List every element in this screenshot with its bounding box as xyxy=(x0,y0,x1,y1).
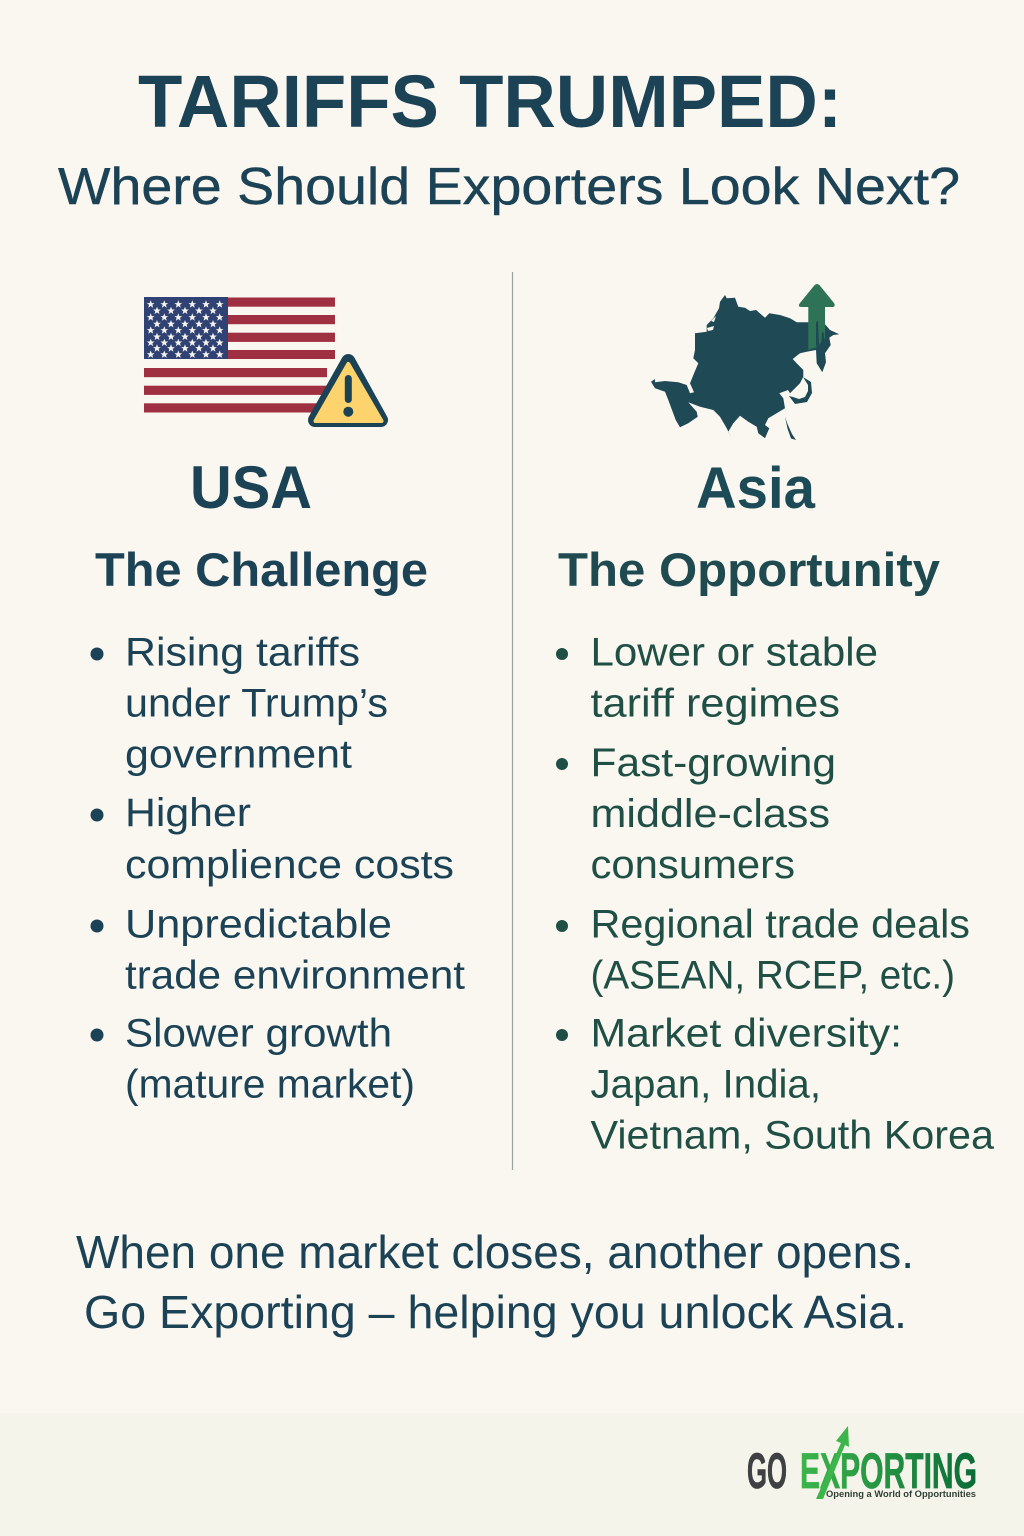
bullet: market diversity: Vietnam, South Korea xyxy=(590,1113,995,1157)
bullet: middle class xyxy=(556,741,836,887)
bullet: slower growth xyxy=(90,1011,415,1106)
bullet: slower growth: (mature market) xyxy=(125,1062,415,1106)
US flag xyxy=(144,297,335,412)
bullet: market diversity: Market diversity: xyxy=(590,1011,902,1055)
bullet: middle class: middle-class xyxy=(590,792,830,836)
bullet: trade deals xyxy=(556,902,970,997)
panel: Asia opportunity xyxy=(556,284,995,1157)
closing message: Go Exporting – helping you unlock Asia. xyxy=(84,1286,907,1338)
warning triangle xyxy=(315,361,382,421)
logo: Go Exporting xyxy=(747,1426,977,1499)
bullet: compliance costs: complience costs xyxy=(125,843,454,887)
closing message xyxy=(76,1226,914,1338)
bullet: compliance costs xyxy=(90,791,454,887)
icon: Asia map with up arrow xyxy=(651,284,839,440)
bullet: rising tariffs: government xyxy=(125,733,352,777)
bullet: rising tariffs: under Trump’s xyxy=(125,682,388,726)
bullet: middle class: Fast-growing xyxy=(590,741,836,785)
bullet: market diversity: Japan, India, xyxy=(590,1062,821,1106)
bullet: market diversity xyxy=(556,1011,995,1157)
heading: USA: USA xyxy=(190,454,312,521)
subheading: The Opportunity: The Opportunity xyxy=(558,543,940,596)
bullet: rising tariffs: Rising tariffs xyxy=(125,630,360,674)
bullet: rising tariffs xyxy=(90,630,388,777)
title: TARIFFS TRUMPED: xyxy=(138,60,842,143)
bullet: trade deals: (ASEAN, RCEP, etc.) xyxy=(590,953,955,997)
Asia map xyxy=(651,295,839,440)
logo: Go Exporting: GO xyxy=(747,1443,787,1499)
bullet list: opportunities xyxy=(556,630,995,1157)
closing message: When one market closes, another opens. xyxy=(76,1226,914,1278)
heading: Asia: Asia xyxy=(696,456,816,521)
bullet: lower tariffs: Lower or stable xyxy=(590,630,878,674)
bullet: compliance costs: Higher xyxy=(125,791,251,835)
bullet: unpredictable trade: Unpredictable xyxy=(125,902,392,946)
bullet: lower tariffs xyxy=(556,630,878,726)
panel: USA challenge xyxy=(90,297,465,1106)
bullet list: challenges xyxy=(90,630,465,1106)
bullet: trade deals: Regional trade deals xyxy=(590,902,970,946)
bullet: unpredictable trade xyxy=(90,902,465,997)
logo: Go Exporting: Opening a World of Opportunities xyxy=(826,1489,976,1499)
bullet: lower tariffs: tariff regimes xyxy=(590,682,840,726)
bullet: middle class: consumers xyxy=(590,843,795,887)
bullet: slower growth: Slower growth xyxy=(125,1011,392,1055)
subtitle: Where Should Exporters Look Next? xyxy=(58,158,960,216)
subheading: The Challenge: The Challenge xyxy=(95,543,428,596)
up arrow xyxy=(799,284,835,350)
icon: US flag with warning triangle xyxy=(144,297,382,421)
bullet: unpredictable trade: trade environment xyxy=(125,953,465,997)
